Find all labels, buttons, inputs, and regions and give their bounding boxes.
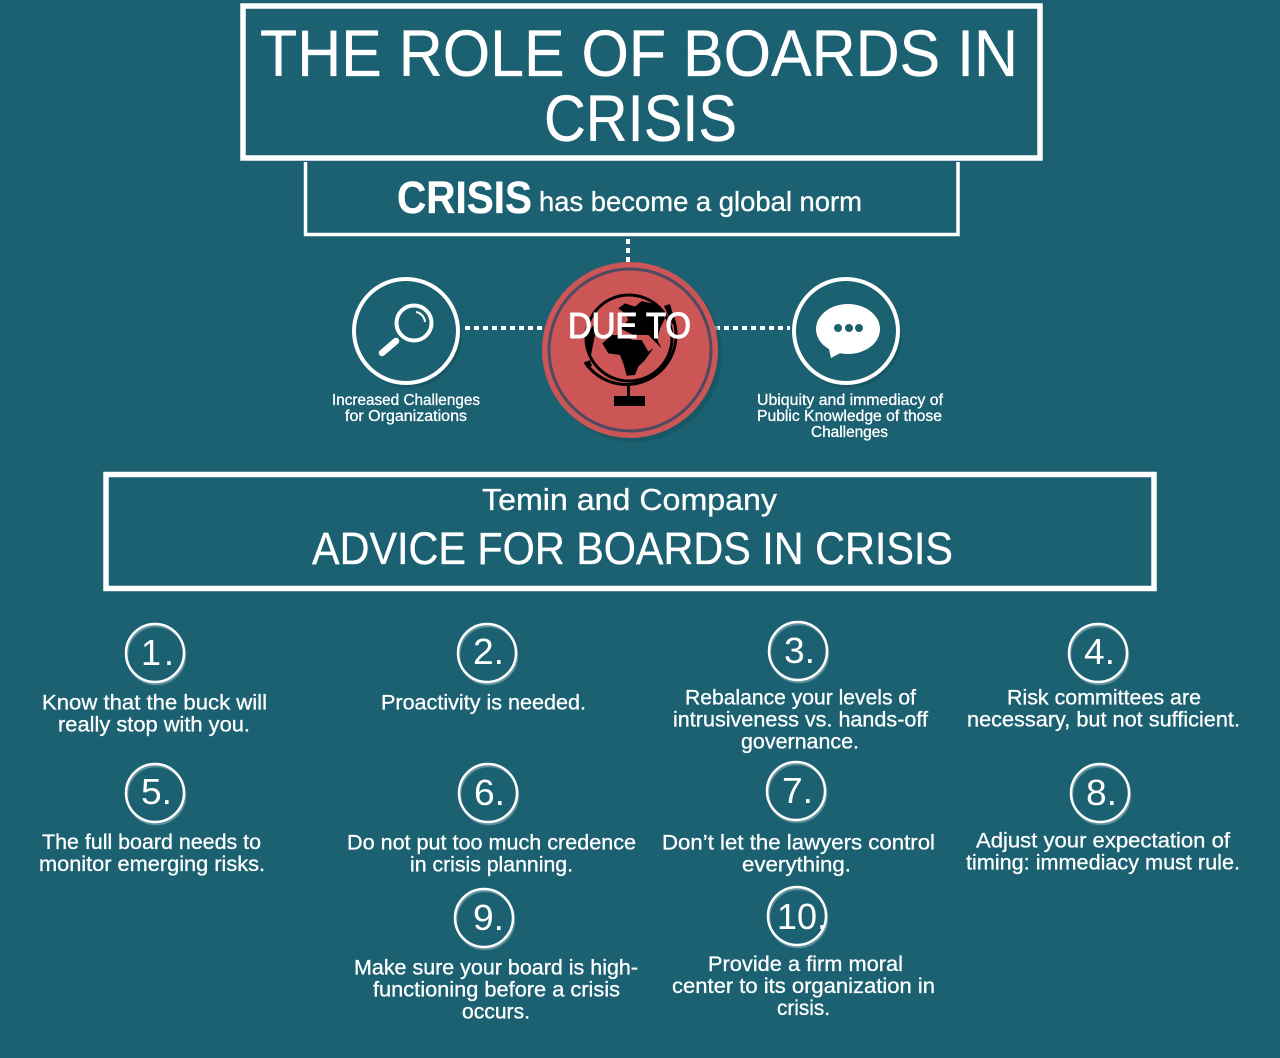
- badge label: DUE TO: [568, 305, 691, 346]
- advice 1: [42, 624, 267, 736]
- advice 5: monitor emerging risks.: [39, 852, 265, 876]
- advice 2: Proactivity is needed.: [381, 690, 586, 714]
- advice 7: Don’t let the lawyers control: [662, 830, 935, 854]
- advice 5: [39, 764, 265, 876]
- caption: public knowledge: Challenges: [811, 424, 888, 441]
- caption: challenges: [332, 392, 480, 425]
- advice 1: really stop with you.: [58, 712, 250, 736]
- subtitle text: [397, 172, 862, 223]
- advice 7: [662, 762, 935, 876]
- advice 8: Adjust your expectation of: [976, 828, 1230, 852]
- advice heading panel: Temin and Company: [482, 482, 778, 517]
- advice 3: governance.: [741, 730, 859, 754]
- advice 5: The full board needs to: [42, 830, 261, 854]
- advice 4: 4.: [1084, 631, 1115, 672]
- title text: CRISIS: [544, 81, 737, 155]
- advice 2: [381, 624, 586, 714]
- advice 4: [967, 624, 1240, 732]
- red globe badge: [542, 262, 722, 442]
- advice 9: occurs.: [462, 1000, 530, 1024]
- advice 7: 7.: [782, 770, 813, 811]
- advice 8: 8.: [1086, 772, 1117, 813]
- advice 8: [966, 764, 1240, 874]
- icon: speech bubble circle: [794, 279, 902, 388]
- advice 9: Make sure your board is high-: [354, 956, 638, 980]
- advice 3: intrusiveness vs. hands-off: [673, 708, 928, 732]
- icon: magnifying glass circle: [354, 279, 462, 388]
- subtitle text: has become a global norm: [539, 186, 862, 217]
- advice 10: crisis.: [777, 996, 830, 1020]
- caption: public knowledge: Public Knowledge of those: [757, 408, 942, 425]
- icon: globe: [584, 295, 676, 406]
- title panel: [243, 6, 1040, 158]
- title text: [260, 16, 1018, 155]
- advice 3: [673, 622, 928, 754]
- advice 3: 3.: [784, 630, 815, 671]
- advice 9: functioning before a crisis: [373, 978, 620, 1002]
- advice 10: 10.: [777, 896, 827, 937]
- advice 10: Provide a firm moral: [708, 952, 903, 976]
- advice 6: in crisis planning.: [410, 852, 573, 876]
- advice 6: [347, 764, 636, 876]
- caption: public knowledge: Ubiquity and immediacy of: [757, 392, 944, 409]
- caption: challenges: Increased Challenges: [332, 392, 480, 409]
- advice 10: center to its organization in: [672, 974, 935, 998]
- advice 3: Rebalance your levels of: [685, 686, 916, 710]
- advice 9: [354, 889, 638, 1024]
- advice 8: timing: immediacy must rule.: [966, 850, 1240, 874]
- dotted connectors: [465, 239, 790, 328]
- caption: challenges: for Organizations: [345, 408, 467, 425]
- advice 6: 6.: [474, 772, 505, 813]
- advice heading panel: ADVICE FOR BOARDS IN CRISIS: [312, 523, 953, 574]
- advice 6: Do not put too much credence: [347, 830, 636, 854]
- advice 4: Risk committees are: [1007, 686, 1201, 710]
- subtitle text: CRISIS: [397, 172, 532, 223]
- advice 1: 1.: [141, 632, 174, 673]
- subtitle panel: [306, 162, 958, 234]
- advice 7: everything.: [742, 852, 851, 876]
- advice 1: Know that the buck will: [42, 690, 267, 714]
- advice 4: necessary, but not sufficient.: [967, 708, 1240, 732]
- advice heading panel: [106, 474, 1154, 588]
- advice 9: 9.: [473, 897, 504, 938]
- title text: THE ROLE OF BOARDS IN: [260, 16, 1018, 90]
- advice 10: [672, 887, 935, 1020]
- caption: public knowledge: [757, 392, 944, 441]
- advice 2: 2.: [473, 631, 504, 672]
- advice 5: 5.: [141, 771, 172, 812]
